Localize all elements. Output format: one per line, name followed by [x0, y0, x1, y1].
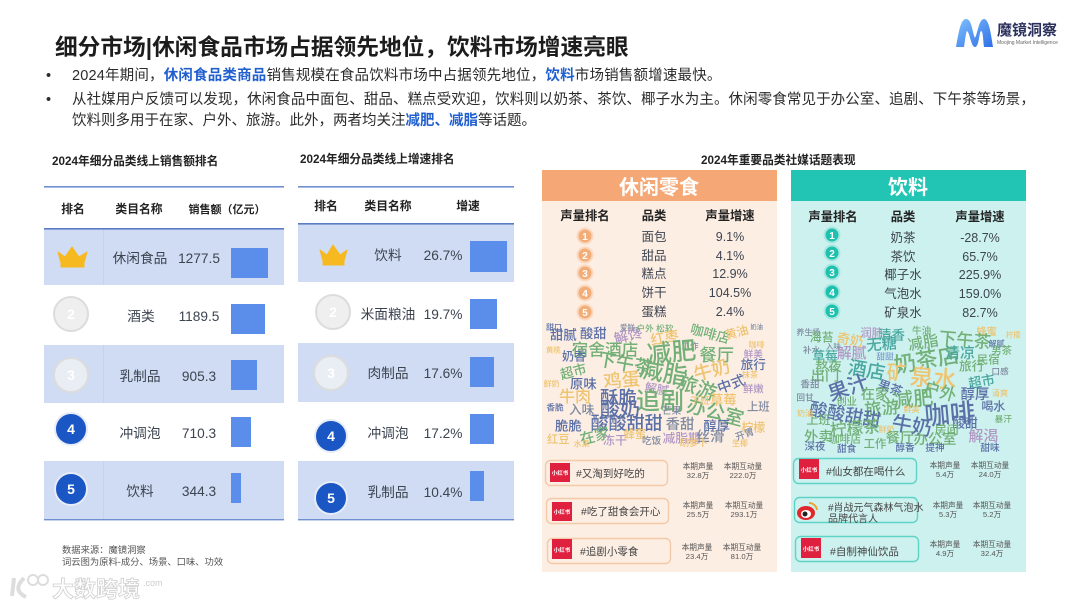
topic row: 吃了甜食会开心: 本期互动量 [725, 500, 764, 510]
word cloud: snacks: 追剧 [636, 388, 684, 415]
word cloud: snacks: 鲜嫩 [743, 382, 764, 395]
word cloud: drinks: 下午茶 [938, 328, 992, 352]
word cloud: snacks: 抹茶 [742, 369, 758, 379]
word cloud: drinks: 外卖 [804, 428, 833, 445]
word cloud: drinks: 解渴 [968, 428, 998, 445]
word cloud: snacks: 旅游 [674, 370, 720, 406]
word cloud: snacks: 柠檬 [741, 419, 765, 434]
logo: 魔镜洞察 [997, 21, 1057, 39]
topic row: 追剧小零食: 81.0万 [731, 552, 754, 561]
topic row: 仙女都在喝什么 [794, 458, 1010, 484]
topic row: 自制神仙饮品: 小红书 [803, 545, 820, 553]
word cloud: drinks [796, 325, 1021, 455]
word cloud: drinks: 奶油 [797, 408, 813, 418]
word cloud: drinks: 奇奶 [836, 330, 864, 350]
word cloud: snacks: 红枣 [649, 328, 680, 349]
bullet text: • [46, 68, 51, 84]
topic row: 仙女都在喝什么: 本期声量 [930, 460, 961, 470]
topic row: 追剧小零食: 本期互动量 [723, 542, 762, 552]
topic row: 吃了甜食会开心: 本期声量 [683, 500, 714, 510]
word cloud: snacks: 牛肉 [559, 388, 591, 406]
word cloud: drinks: 海苔 [810, 329, 834, 344]
panel: drinks: 1 [829, 231, 835, 242]
word cloud: snacks: 宿舍酒店 [572, 339, 638, 359]
topic row: 吃了甜食会开心: 小红书 [554, 508, 571, 516]
table: sales ranking: 销售额（亿元） [188, 202, 266, 216]
word cloud: snacks: 工作 [681, 340, 699, 351]
panel: drinks: 3 [829, 268, 835, 279]
topic row: 仙女都在喝什么: 24.0万 [979, 470, 1002, 479]
word cloud: drinks: 咖啡店 [829, 432, 861, 445]
panel: drinks: 225.9% [959, 268, 1001, 282]
word cloud: snacks: 芒果 [662, 405, 682, 417]
topic row: 追剧小零食: 本期声量 [682, 542, 713, 552]
bullet text: 饮料则多用于在家、户外、旅游。此外，两者均关注减肥、减脂等话题。 [72, 111, 536, 129]
word cloud: snacks: 旅行 [741, 357, 766, 372]
panel: snacks: 2.4% [716, 305, 744, 319]
word cloud: snacks: 蜂蜜 [624, 427, 646, 441]
table: sales ranking: 5 [67, 481, 75, 497]
panel: snacks: 休闲零食 [619, 175, 699, 199]
word cloud: snacks: 减肥 [646, 337, 697, 369]
logo: Moojing Market Intelligence [997, 40, 1058, 46]
word cloud: snacks: 奶油 [750, 322, 763, 331]
word cloud: drinks: 减肥 [892, 386, 934, 413]
title: 细分市场|休闲食品市场占据领先地位，饮料市场增速亮眼 [55, 34, 629, 60]
word cloud: snacks: 酸酸甜甜 [591, 413, 663, 433]
table: growth ranking: 4 [327, 428, 335, 444]
word cloud: drinks: 上班 [806, 413, 830, 427]
table: sales ranking: 饮料 [126, 484, 154, 499]
word cloud: snacks: 鲜美 [744, 348, 763, 360]
panel: drinks [791, 170, 1026, 572]
word cloud: drinks: 旅行 [959, 359, 985, 374]
table: growth ranking: 排名 [314, 199, 338, 213]
bullet text: 从社媒用户反馈可以发现，休闲食品中面包、甜品、糕点受欢迎，饮料则以奶茶、茶饮、椰子水为主。休闲零食常见于办公室、追剧、下午茶等场景， [72, 90, 1035, 108]
table: growth ranking: 10.4% [424, 485, 462, 500]
word cloud: snacks: 下午茶 [596, 348, 654, 378]
word cloud: drinks: 解腻 [837, 345, 867, 362]
word cloud: drinks: 牛油 [912, 325, 931, 337]
panel: drinks: 4 [829, 288, 835, 299]
panel: drinks: 2 [829, 249, 835, 260]
word cloud: drinks: 牛奶 [890, 411, 933, 441]
table: sales ranking: 4 [67, 421, 75, 437]
topic row: 肖战元气森林气泡水: 品牌代言人 [828, 512, 878, 525]
word cloud: drinks: 在家 [861, 386, 889, 403]
word cloud: snacks: 减脂期 [663, 431, 701, 445]
word cloud: snacks: 在家 [578, 425, 612, 449]
word cloud: snacks: 鲜奶 [544, 378, 560, 388]
word cloud: drinks: 喝水 [981, 399, 1005, 414]
word cloud: snacks: 醇厚 [703, 417, 730, 433]
word cloud: snacks: 办公室 [684, 395, 746, 431]
table: sales ranking: 710.3 [182, 426, 217, 441]
word cloud: drinks: 暴汗 [995, 413, 1012, 424]
icon: crown [58, 247, 87, 267]
word cloud: drinks: 香甜 [800, 378, 820, 390]
panel: drinks: 椰子水 [884, 267, 922, 282]
word cloud: snacks: 香甜 [666, 416, 694, 433]
word cloud: snacks: 甜口 [546, 322, 562, 332]
word cloud: drinks: 口感 [991, 366, 1009, 377]
panel: drinks: -28.7% [960, 231, 1000, 245]
table: sales ranking: 2 [67, 306, 75, 322]
panel: drinks: 5 [829, 307, 835, 318]
source note: 数据来源：魔镜洞察 [62, 544, 146, 555]
watermark: 大数跨境 [52, 577, 140, 602]
topic row: 肖战元气森林气泡水: 5.2万 [983, 510, 1001, 519]
table: sales ranking: 3 [67, 367, 75, 383]
panel: drinks: 65.7% [962, 250, 998, 264]
word cloud: snacks: 黄油 [723, 322, 750, 343]
topic row: 吃了甜食会开心: 293.1万 [731, 510, 758, 519]
table: growth ranking: 2 [329, 304, 337, 320]
word cloud: snacks: 生椰 [732, 438, 748, 448]
topic row: 肖战元气森林气泡水: 本期声量 [933, 500, 964, 510]
word cloud: snacks: 奶香 [562, 349, 586, 364]
table: sales ranking: 344.3 [182, 484, 217, 499]
word cloud: snacks: 中式 [715, 372, 748, 397]
panel: snacks: 面包 [641, 230, 667, 244]
word cloud: snacks: 入味 [569, 403, 595, 417]
panel: snacks: 4 [582, 289, 588, 300]
word cloud: snacks: 解腻 [644, 379, 670, 398]
topic row: 肖战元气森林气泡水: 本期互动量 [973, 500, 1012, 510]
word cloud: drinks: 鲜美 [904, 404, 920, 414]
panel: drinks: 声量增速 [955, 209, 1005, 224]
word cloud: drinks: 清香 [878, 327, 905, 342]
table: growth ranking: 类目名称 [364, 199, 412, 213]
word cloud: drinks: 奶茶店 [892, 342, 961, 378]
topic row: 又淘到好吃的: 本期互动量 [724, 461, 763, 471]
topic row: 又淘到好吃的: 222.0万 [730, 471, 757, 480]
topic row: 又淘到好吃的 [546, 460, 763, 486]
topic row: 自制神仙饮品: #自制神仙饮品 [830, 545, 899, 558]
word cloud: drinks: 蜂蜜 [976, 325, 997, 338]
word cloud: drinks: 咖啡 [924, 399, 976, 431]
word cloud: snacks: 上班 [747, 400, 770, 413]
word cloud: drinks: 草莓 [812, 350, 838, 364]
watermark [12, 575, 163, 602]
panel: drinks: 茶饮 [890, 249, 916, 264]
heading: growth ranking: 2024年细分品类线上增速排名 [300, 152, 455, 166]
icon: crown [320, 245, 347, 265]
word cloud: drinks: 酸酸甜甜 [808, 399, 882, 431]
panel: snacks: 3 [582, 269, 588, 280]
panel: snacks: 1 [582, 232, 588, 243]
word cloud: snacks: 减脂 [637, 356, 689, 391]
topic row: 自制神仙饮品: 本期声量 [930, 539, 961, 549]
panel: snacks: 声量增速 [705, 208, 755, 223]
word cloud: drinks: 酒店 [846, 356, 887, 384]
word cloud: drinks: 柠檬 [1006, 330, 1021, 339]
table: growth ranking: 米面粮油 [361, 307, 415, 322]
table: growth ranking: 26.7% [424, 248, 462, 263]
topic row: 自制神仙饮品: 32.4万 [981, 549, 1004, 558]
word cloud: snacks: 餐厅 [699, 345, 734, 365]
panel: drinks: 159.0% [959, 287, 1001, 301]
topic row: 追剧小零食: 23.4万 [686, 552, 709, 561]
logo [956, 19, 1058, 47]
topic row: 追剧小零食: #追剧小零食 [580, 545, 639, 558]
topic row: 自制神仙饮品: 本期互动量 [973, 539, 1012, 549]
word cloud: snacks: 酸甜 [580, 326, 607, 341]
topic row: 又淘到好吃的: 32.8万 [687, 471, 710, 480]
panel: snacks: 104.5% [709, 286, 751, 300]
panel: snacks: 9.1% [716, 230, 744, 244]
word cloud: snacks: 咖啡 [749, 339, 765, 349]
panel: snacks: 5 [582, 308, 588, 319]
word cloud: snacks: 开胃 [734, 427, 756, 443]
word cloud: drinks: 男茶 [991, 344, 1013, 357]
table: growth ranking: 3 [327, 365, 335, 381]
word cloud: snacks: 红豆 [547, 432, 570, 446]
topic row: 自制神仙饮品 [796, 536, 1012, 562]
heading: social topics: 2024年重要品类社媒话题表现 [701, 153, 856, 167]
word cloud: snacks: 爱鲜 [620, 323, 635, 332]
topic row: 仙女都在喝什么: 小红书 [801, 466, 818, 474]
topic row: 仙女都在喝什么: 本期互动量 [971, 460, 1010, 470]
table: growth ranking: 肉制品 [367, 366, 409, 381]
word cloud: drinks: 甜甜 [876, 351, 894, 362]
panel: snacks: 4.1% [716, 249, 744, 263]
icon: weibo [797, 503, 817, 520]
word cloud: drinks: 果汁 [825, 370, 872, 406]
word cloud: drinks: 清爽 [992, 388, 1008, 398]
topic row: 追剧小零食: 小红书 [554, 546, 571, 554]
panel: snacks: 12.9% [712, 267, 748, 281]
table: sales ranking: 酒类 [127, 309, 155, 324]
topic row: 吃了甜食会开心: 25.5万 [687, 510, 710, 519]
table: growth ranking: 饮料 [374, 248, 402, 263]
topic row: 吃了甜食会开心 [546, 498, 764, 524]
source note [62, 544, 223, 567]
watermark: .com [143, 578, 163, 588]
word cloud: snacks: 胡萝卜 [680, 437, 708, 449]
word cloud: drinks: 旅游 [864, 397, 900, 420]
word cloud: snacks: 丝滑 [696, 428, 724, 445]
word cloud: drinks: 房间 [935, 422, 959, 437]
word cloud: drinks: 办公室 [913, 430, 956, 448]
word cloud: drinks: 醇香 [895, 442, 915, 454]
word cloud: drinks: 润肺 [860, 326, 883, 340]
heading: sales ranking: 2024年细分品类线上销售额排名 [52, 154, 218, 168]
word cloud: snacks: 牛奶 [691, 355, 732, 385]
table: sales ranking: 冲调泡 [119, 426, 161, 441]
word cloud: drinks: 减脂 [907, 332, 940, 354]
topic row: 仙女都在喝什么: 5.4万 [936, 470, 954, 479]
word cloud: snacks: 吃饭 [642, 435, 662, 447]
word cloud: drinks: 酸甜 [952, 415, 978, 430]
table: growth ranking: 增速 [456, 199, 480, 213]
word cloud: drinks: 熬夜 [815, 358, 842, 374]
word cloud: drinks: 矿 [887, 361, 907, 384]
word cloud: drinks: 醇厚 [961, 386, 989, 403]
table: growth ranking: 乳制品 [367, 485, 409, 500]
word cloud: snacks: 脆脆 [555, 418, 582, 433]
word cloud: snacks: 户外 松软 [636, 322, 674, 333]
panel: drinks: 声量排名 [808, 209, 858, 224]
topic row: 又淘到好吃的: #又淘到好吃的 [576, 467, 645, 480]
bullet text: • [46, 92, 51, 108]
table: sales ranking: 1189.5 [179, 309, 220, 324]
word cloud: snacks: 解馋 [612, 324, 645, 348]
word cloud: drinks: 回甘 [796, 391, 814, 402]
word cloud: drinks: 创业 [836, 395, 857, 408]
panel: snacks: 声量排名 [560, 208, 610, 223]
word cloud: snacks: 超市 [558, 360, 588, 382]
panel: drinks: 奶茶 [890, 230, 916, 245]
word cloud: drinks: 工作 [864, 437, 886, 450]
topic row: 肖战元气森林气泡水: 5.3万 [939, 510, 957, 519]
word cloud: snacks: 草莓 [710, 392, 737, 407]
word cloud: drinks: 出门 [811, 368, 839, 385]
word cloud: drinks: 入味 [826, 342, 841, 351]
table: sales ranking: 休闲食品 [113, 250, 167, 266]
panel: drinks: 矿泉水 [884, 305, 922, 320]
topic row: 吃了甜食会开心: #吃了甜食会开心 [581, 505, 661, 518]
panel: drinks: 品类 [891, 209, 915, 224]
word cloud: drinks: 深夜 [805, 440, 826, 453]
word cloud: drinks: 甜味 [980, 442, 1000, 454]
bullet text: 2024年期间，休闲食品类商品销售规模在食品饮料市场中占据领先地位，饮料市场销售额增速最快。 [72, 66, 722, 84]
topic row: 肖战元气森林气泡水: #肖战元气森林气泡水 [828, 501, 924, 514]
panel: snacks: 甜品 [641, 249, 667, 263]
table: growth ranking: 冲调泡 [367, 426, 409, 441]
table: sales ranking: 类目名称 [115, 202, 163, 216]
word cloud: snacks: 咖啡店 [689, 322, 731, 346]
table: sales ranking: 1277.5 [178, 251, 220, 266]
word cloud: drinks: 补水 [803, 344, 821, 355]
table: growth ranking [298, 186, 514, 520]
word cloud: snacks: 鸡蛋 [602, 368, 641, 392]
panel: drinks: 82.7% [962, 306, 998, 320]
word cloud: drinks: 清凉 [945, 345, 975, 362]
panel: snacks: 品类 [642, 208, 666, 223]
word cloud: drinks: 提神 [925, 442, 945, 454]
word cloud: drinks: 超市 [967, 371, 996, 391]
panel: snacks: 2 [582, 251, 588, 262]
word cloud: snacks: 水果 [574, 438, 590, 448]
topic row: 追剧小零食 [548, 538, 762, 564]
word cloud: snacks: 冻干 [603, 433, 627, 448]
table: growth ranking: 19.7% [424, 307, 462, 322]
word cloud: drinks: 民宿 [977, 353, 1000, 367]
table: sales ranking: 乳制品 [119, 369, 161, 384]
topic row: 肖战元气森林气泡水 [794, 498, 1012, 525]
table: growth ranking: 17.6% [424, 366, 462, 381]
word cloud: drinks: 泉水 [909, 363, 958, 393]
panel: drinks: 饮料 [888, 176, 928, 199]
word cloud: drinks: 餐厅 [886, 429, 914, 446]
panel: snacks: 糕点 [641, 267, 667, 281]
word cloud: drinks: 无糖 [866, 335, 898, 355]
source note: 词云图为原料-成分、场景、口味、功效 [62, 556, 223, 567]
topic row: 又淘到好吃的: 小红书 [552, 469, 569, 477]
word cloud: drinks: 解腻 [989, 338, 1005, 348]
panel: snacks: 饼干 [641, 286, 667, 300]
word cloud: snacks: 原味 [570, 376, 597, 391]
word cloud: drinks: 养生场 [796, 327, 820, 337]
table: sales ranking: 905.3 [182, 369, 217, 384]
word cloud: drinks: 鲜奶 [879, 424, 895, 434]
panel: drinks: 气泡水 [884, 286, 922, 301]
table: growth ranking: 5 [327, 490, 335, 506]
word cloud: snacks: 下班 [690, 395, 710, 407]
word cloud: snacks: 香脆 [546, 401, 564, 412]
word cloud: snacks: 酸奶 [600, 398, 640, 421]
bullet text [46, 66, 1035, 129]
table: sales ranking: 排名 [61, 202, 85, 216]
word cloud: drinks: 柠檬茶 [829, 417, 881, 440]
panel: snacks [542, 170, 777, 572]
word cloud: snacks: 酥脆 [600, 387, 637, 408]
table: sales ranking [44, 186, 284, 520]
word cloud: drinks: 户外 [921, 378, 959, 405]
word cloud: drinks: 甜食 [837, 443, 857, 455]
panel: snacks: 蛋糕 [641, 305, 667, 319]
topic row: 又淘到好吃的: 本期声量 [683, 461, 714, 471]
table: growth ranking: 17.2% [424, 426, 462, 441]
word cloud: snacks: 甜腻 [550, 327, 577, 342]
topic row: 仙女都在喝什么: #仙女都在喝什么 [826, 465, 905, 478]
word cloud: drinks: 果茶 [876, 376, 905, 399]
word cloud: snacks [544, 322, 770, 449]
topic row: 自制神仙饮品: 4.9万 [936, 549, 954, 558]
word cloud: snacks: 黄桃 [546, 345, 561, 354]
